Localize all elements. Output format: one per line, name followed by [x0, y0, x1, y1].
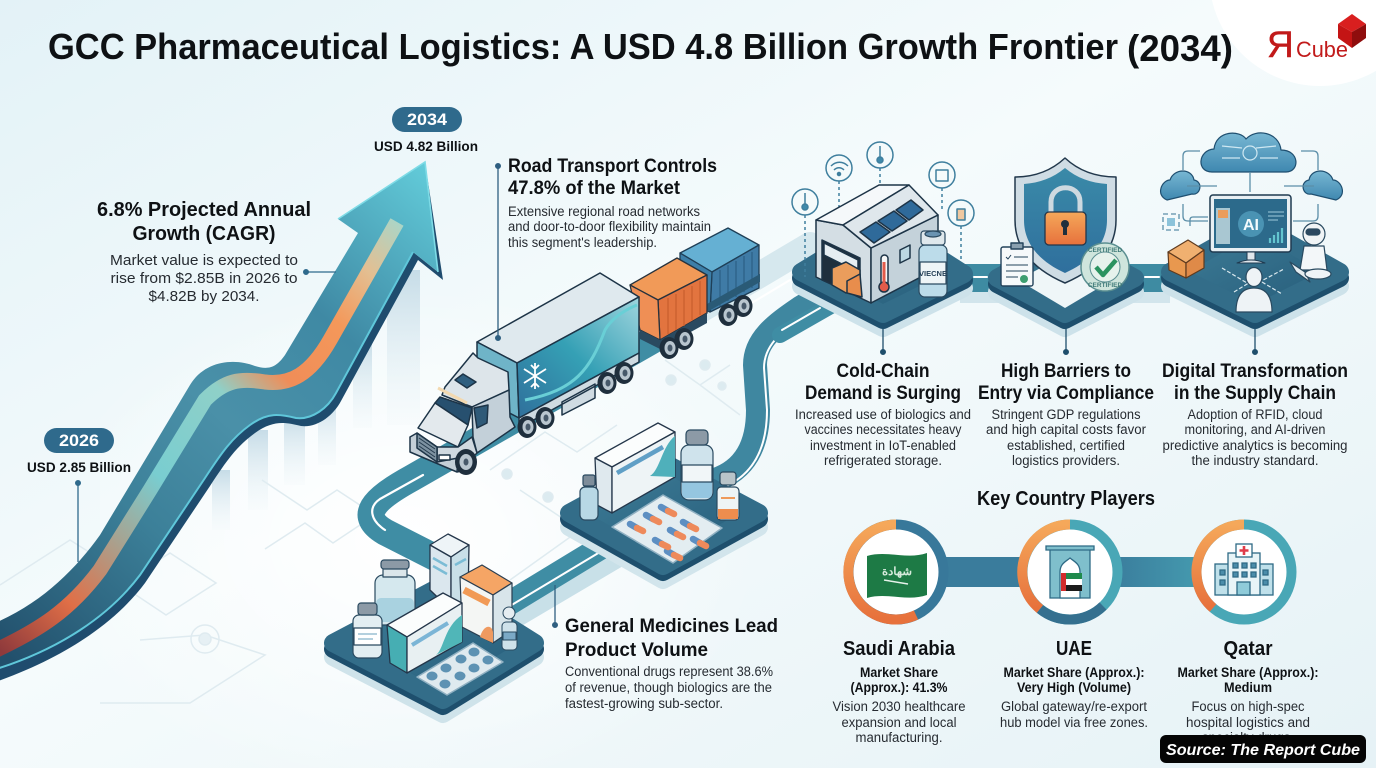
text block: compliance: Stringent GDP regulations — [992, 407, 1141, 422]
country ring: UAE — [1022, 524, 1118, 620]
cab — [410, 353, 515, 472]
text block: compliance: established, certified — [1007, 438, 1125, 453]
text block: compliance: Entry via Compliance — [978, 382, 1154, 404]
text block: Saudi Arabia: Saudi Arabia — [843, 638, 956, 660]
title: GCC Pharmaceutical Logistics: A USD 4.8 Billion Growth Frontier — [48, 26, 1118, 67]
source badge: Source: The Report Cube — [1166, 742, 1360, 759]
rear wheels — [660, 295, 752, 359]
text block: CAGR: Growth (CAGR) — [132, 222, 276, 245]
label: USD 2.85 Billion: USD 2.85 Billion — [27, 460, 131, 475]
growth bars — [212, 270, 420, 530]
padlock — [1045, 188, 1086, 245]
heading: key country players: Key Country Players — [977, 488, 1155, 510]
connector: CAGR — [304, 270, 336, 274]
text block: cold chain: Demand is Surging — [805, 382, 961, 404]
small vial — [353, 603, 382, 658]
platform: cold chain — [792, 142, 974, 328]
text block: Qatar: Medium — [1224, 680, 1272, 695]
connector: compliance — [1064, 327, 1068, 354]
text block: compliance: and high capital costs favor — [986, 422, 1146, 437]
text block: CAGR: 6.8% Projected Annual — [97, 198, 311, 221]
blue container — [680, 228, 760, 316]
icon: hospital — [1215, 544, 1273, 595]
text block: general medicines: of revenue, though biologics are the — [565, 680, 772, 695]
text block: cold chain — [795, 360, 971, 468]
text block: road transport: this segment's leadership. — [508, 235, 657, 250]
text block: Saudi Arabia: (Approx.): 41.3% — [850, 680, 948, 695]
text block: Saudi Arabia: expansion and local — [842, 715, 956, 730]
text block: digital: Digital Transformation — [1162, 360, 1348, 382]
label: USD 4.82 Billion: USD 4.82 Billion — [374, 139, 478, 154]
logo: Я — [1267, 24, 1294, 65]
certified seal: CERTIFIED — [1088, 282, 1122, 289]
large vial — [375, 560, 415, 625]
dropper bottle — [502, 607, 517, 650]
trailer — [477, 273, 639, 428]
badge: 2026 — [44, 428, 114, 453]
text block: cold chain: refrigerated storage. — [824, 453, 942, 468]
truck and containers — [410, 228, 760, 475]
text block: general medicines: General Medicines Lead — [565, 615, 778, 637]
country ring: Saudi Arabia — [848, 524, 944, 620]
connector: digital — [1252, 327, 1258, 354]
text block: cold chain: Cold-Chain — [836, 360, 930, 382]
small vial — [580, 475, 598, 520]
text block: Saudi Arabia: Vision 2030 healthcare — [832, 699, 966, 714]
text block: cold chain: investment in IoT-enabled — [810, 438, 956, 453]
text block: digital: Adoption of RFID, cloud — [1188, 407, 1322, 422]
text block: UAE: Global gateway/re-export — [1001, 699, 1147, 714]
capsule blister — [612, 495, 722, 563]
clipboard — [1001, 243, 1033, 286]
country connector bars — [940, 557, 1245, 587]
text block: general medicines: Product Volume — [565, 639, 708, 661]
certified seal: CERTIFIED — [1088, 247, 1122, 254]
icon: Saudi flag: شهادة — [882, 566, 912, 578]
text block: Qatar: Qatar — [1224, 638, 1273, 660]
road network — [371, 245, 1170, 620]
icon: gateway with UAE flag — [1046, 546, 1094, 598]
central cloud — [1201, 133, 1296, 172]
tall carton — [430, 534, 469, 610]
AI monitor: AI — [1243, 217, 1259, 234]
text block: road transport — [508, 155, 717, 250]
parcel — [1168, 240, 1204, 278]
text block: UAE: Market Share (Approx.): — [1004, 665, 1144, 680]
text block: cold chain: vaccines necessitates heavy — [804, 422, 962, 437]
background glow — [100, 200, 900, 768]
text block: UAE: hub model via free zones. — [1000, 715, 1148, 730]
person — [1236, 268, 1272, 312]
connector: general medicines — [552, 585, 558, 628]
connector: 2026 — [76, 480, 80, 562]
text block: road transport: Extensive regional road networks — [508, 204, 700, 219]
tablet blister — [417, 643, 503, 695]
text block: CAGR: rise from $2.85B in 2026 to — [110, 271, 298, 287]
growth arrow — [0, 162, 443, 684]
text block: cold chain: Increased use of biologics and — [795, 407, 971, 422]
side clouds — [1161, 171, 1342, 200]
badge: 2026: 2026 — [59, 431, 99, 450]
text block: compliance — [978, 360, 1154, 468]
text block: Saudi Arabia: manufacturing. — [856, 730, 942, 745]
text block: digital — [1162, 360, 1348, 468]
text block: compliance: logistics providers. — [1012, 453, 1120, 468]
teal carton — [387, 593, 462, 673]
text block: digital: monitoring, and AI-driven — [1184, 422, 1326, 437]
snowflake — [524, 363, 546, 389]
text block: Qatar — [1178, 638, 1318, 745]
trailer wheels — [518, 362, 634, 438]
vaccine vial: VIECNE — [919, 269, 947, 278]
sensor icons — [792, 142, 974, 277]
badge: 2034: 2034 — [407, 110, 448, 129]
orange carton — [460, 565, 512, 643]
shield — [1015, 158, 1116, 283]
source badge — [1160, 735, 1366, 763]
text block: road transport: 47.8% of the Market — [508, 177, 680, 199]
certified seal — [1081, 243, 1129, 291]
text block: road transport: Road Transport Controls — [508, 155, 717, 177]
medicine carton — [595, 423, 675, 513]
text block: UAE: Very High (Volume) — [1017, 680, 1131, 695]
text block: Qatar: Focus on high-spec — [1192, 699, 1305, 714]
country ring: Qatar — [1196, 524, 1292, 620]
text block: UAE — [1000, 638, 1148, 730]
title: (2034) — [1127, 28, 1233, 69]
connector: cold chain — [880, 327, 886, 354]
text block: Qatar: specialty drugs. — [1202, 730, 1294, 745]
text block: general medicines: Conventional drugs represent 38.6% — [565, 664, 773, 679]
text block: digital: predictive analytics is becoming — [1162, 438, 1348, 453]
orange vial — [717, 472, 739, 520]
robot — [1290, 223, 1331, 282]
text block: Saudi Arabia: Market Share — [860, 665, 938, 680]
large vial — [681, 430, 713, 500]
text block: road transport: and door-to-door flexibility maintain — [508, 219, 711, 234]
text block: CAGR: $4.82B by 2034. — [148, 289, 260, 305]
platform: general medicines upper — [569, 423, 759, 580]
text block: compliance: High Barriers to — [1001, 360, 1131, 382]
connector: road transport — [496, 164, 500, 340]
platform: digital — [1161, 133, 1342, 328]
text block: digital: in the Supply Chain — [1174, 382, 1336, 404]
text block: general medicines — [565, 615, 778, 711]
decorative circuit lines — [0, 360, 740, 703]
text block: general medicines: fastest-growing sub-sector. — [565, 696, 723, 711]
logo — [1209, 0, 1376, 86]
orange container — [630, 258, 707, 349]
text block: CAGR: Market value is expected to — [110, 253, 298, 269]
vaccine vial — [919, 231, 947, 297]
text block: Qatar: Market Share (Approx.): — [1178, 665, 1318, 680]
text block: Qatar: hospital logistics and — [1186, 715, 1310, 730]
text block: CAGR — [97, 198, 311, 305]
text block: digital: the industry standard. — [1192, 453, 1318, 468]
flow arrows — [1163, 151, 1318, 230]
text block: UAE: UAE — [1056, 638, 1092, 660]
platform: general medicines bottom — [333, 534, 535, 714]
badge: 2034 — [392, 107, 462, 132]
platform: compliance — [997, 158, 1135, 328]
AI monitor — [1210, 195, 1291, 263]
logo: Cube — [1296, 37, 1348, 62]
front wheel — [455, 449, 477, 475]
warehouse — [816, 185, 938, 303]
text block: Saudi Arabia — [832, 638, 966, 745]
